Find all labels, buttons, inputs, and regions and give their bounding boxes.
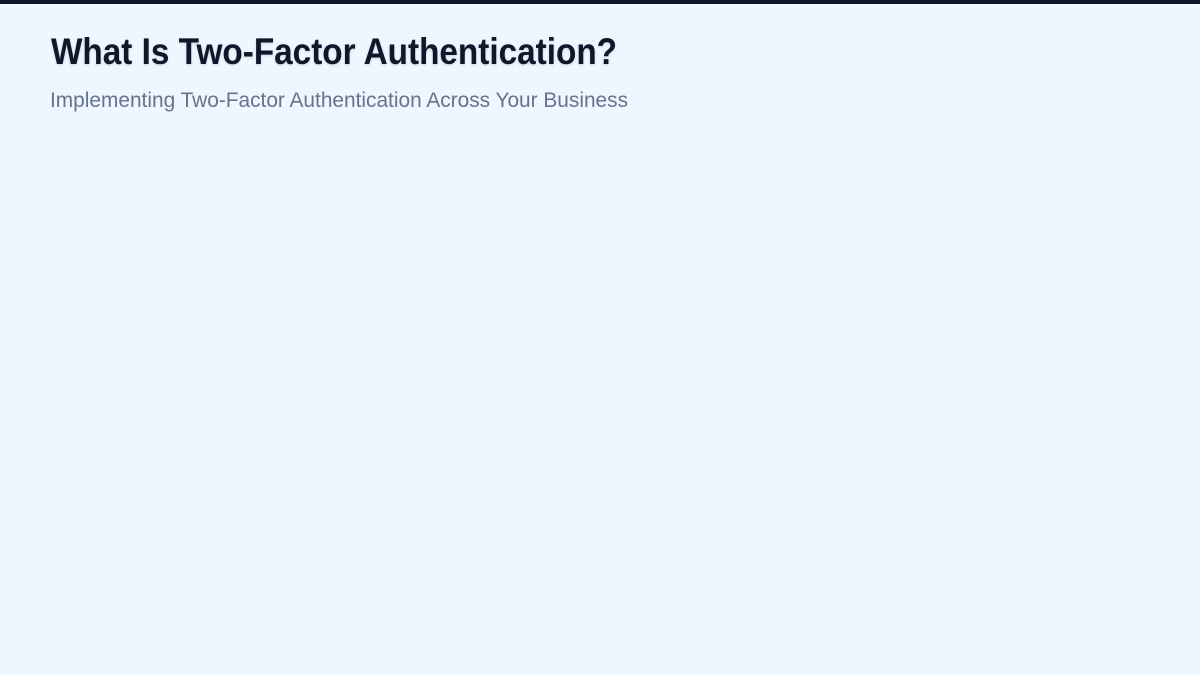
subtitle: Implementing Two-Factor Authentication Across Your Business (50, 89, 628, 112)
header (50, 31, 628, 112)
title: What Is Two-Factor Authentication? (51, 31, 617, 72)
top bar (0, 0, 1200, 4)
